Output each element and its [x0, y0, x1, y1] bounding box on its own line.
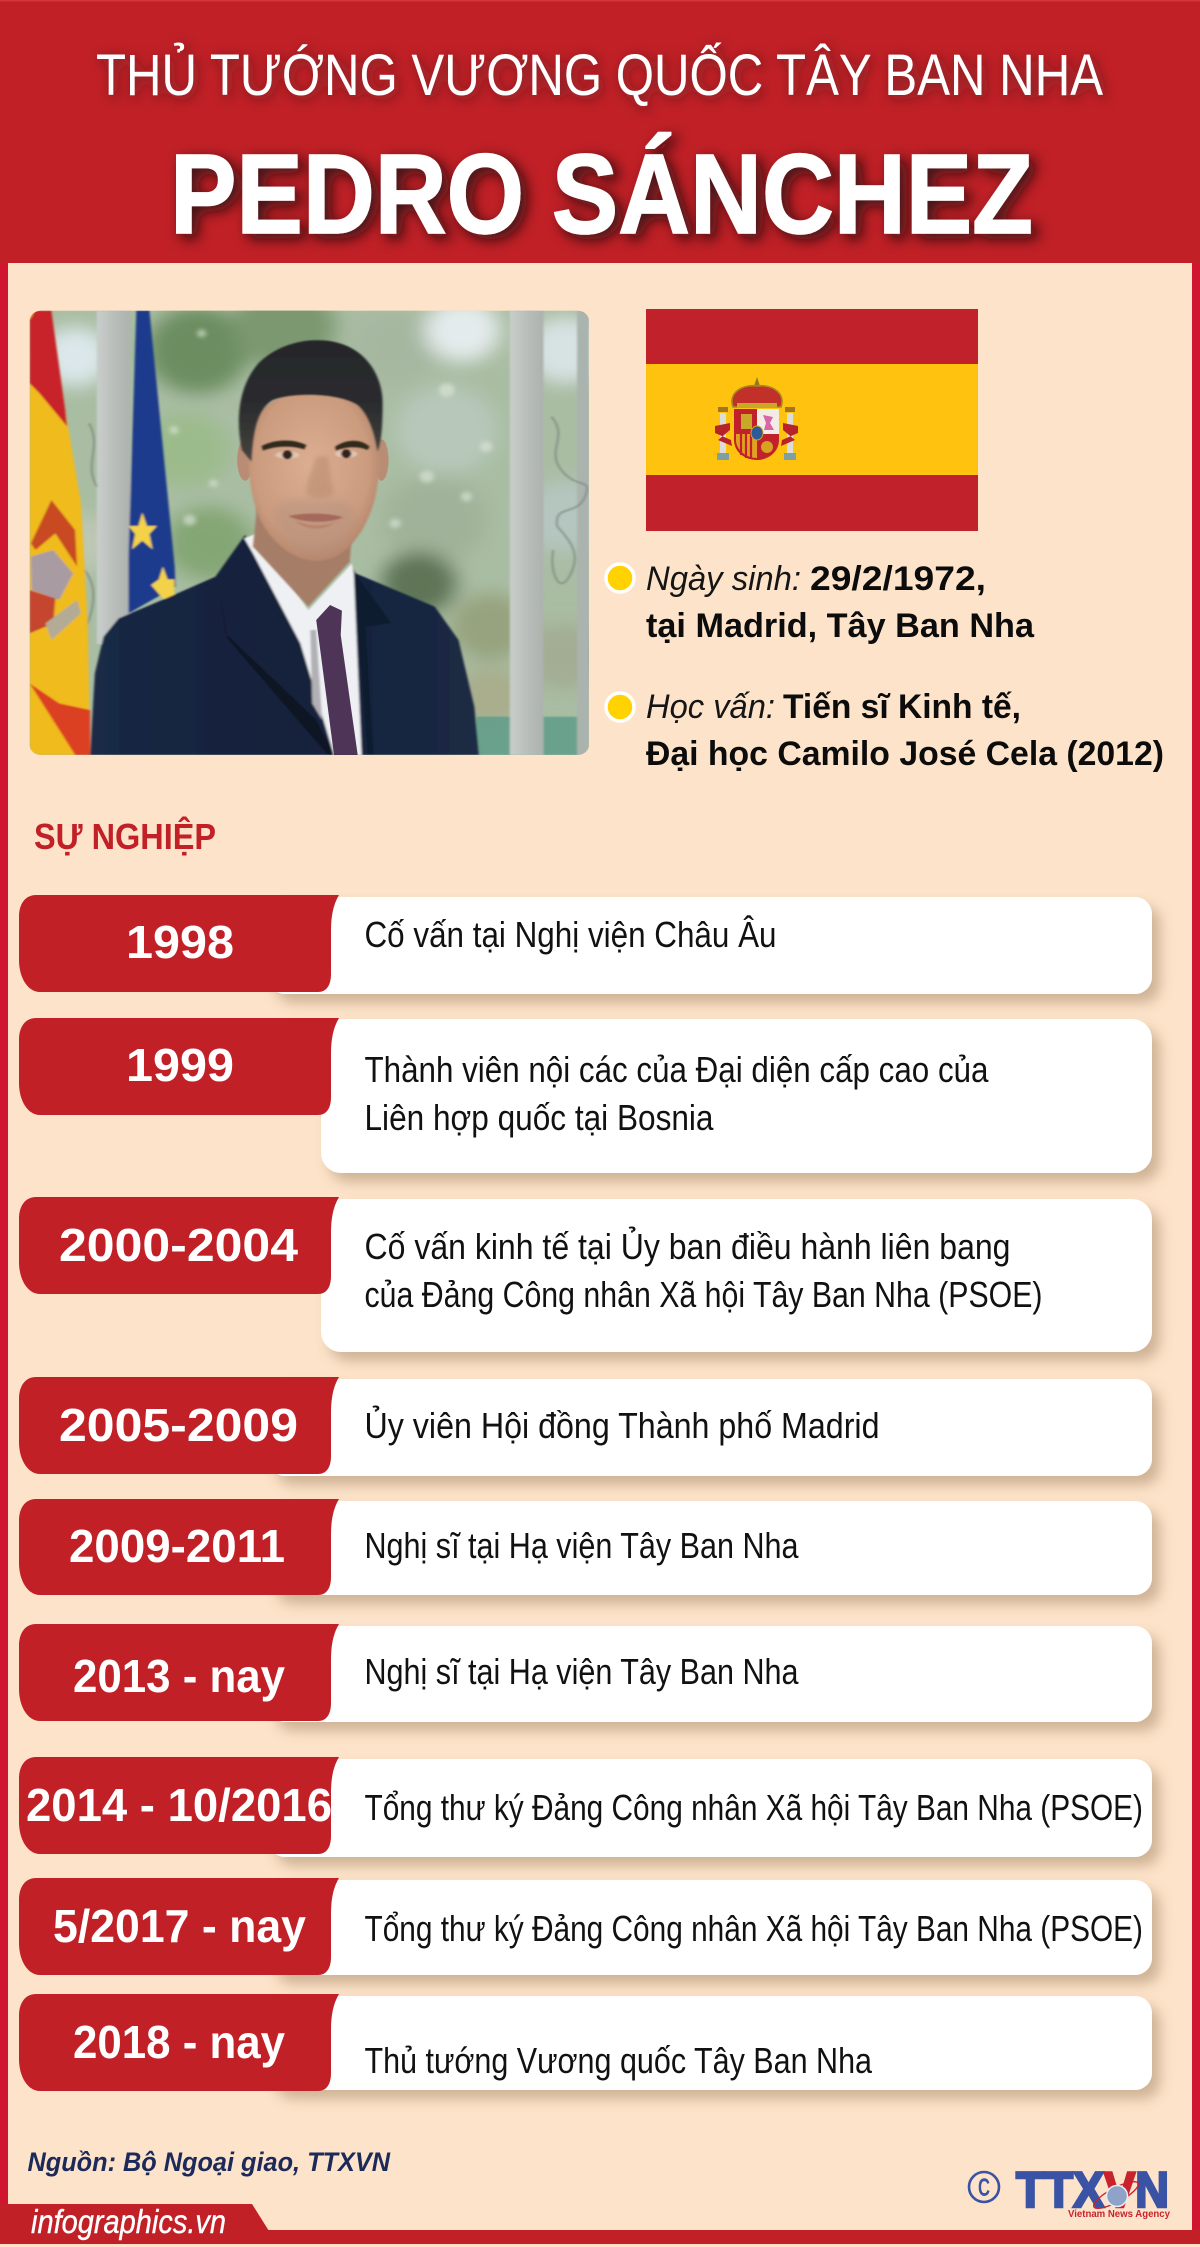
timeline row: 1998: 1998	[126, 916, 234, 968]
value: place: tại Madrid, Tây Ban Nha	[646, 607, 1035, 645]
EU flag	[128, 311, 175, 613]
timeline row: 2000-2004: của Đảng Công nhân Xã hội Tây Ban Nha (PSOE)	[364, 1274, 1042, 1315]
wrought iron window details	[81, 417, 587, 630]
suit	[90, 535, 479, 755]
timeline row: 1999: 1999	[126, 1039, 234, 1091]
timeline row: 2005-2009	[19, 1377, 1152, 1476]
timeline row: 2018 - nay: Thủ tướng Vương quốc Tây Ban Nha	[364, 2040, 873, 2081]
icon: copyright mark: C	[978, 2174, 990, 2202]
timeline row: 1998: Cố vấn tại Nghị viện Châu Âu	[364, 914, 776, 955]
timeline row: 1998	[19, 895, 1152, 994]
ears	[237, 442, 250, 481]
value: degree: Tiến sĩ Kinh tế,	[783, 688, 1021, 726]
bio: education	[606, 688, 1164, 773]
timeline row: 1999: Thành viên nội các của Đại diện cấp cao của	[364, 1049, 989, 1090]
portrait photo	[30, 283, 609, 755]
face	[248, 388, 380, 561]
timeline row: 2013 - nay	[19, 1624, 1152, 1722]
timeline row: 1999: Liên hợp quốc tại Bosnia	[364, 1097, 714, 1138]
timeline row: 2018 - nay: 2018 - nay	[73, 2016, 285, 2068]
icon: globe	[1091, 2177, 1141, 2213]
icon: yellow bullet	[606, 564, 634, 592]
timeline row: 2005-2009: Ủy viên Hội đồng Thành phố Madrid	[364, 1404, 880, 1446]
flag of Spain	[646, 309, 978, 531]
label: education: Học vấn:	[646, 688, 775, 726]
Spanish flag	[30, 311, 90, 755]
timeline row: 2013 - nay: Nghị sĩ tại Hạ viện Tây Ban Nha	[364, 1651, 799, 1692]
timeline row: 2014 - 10/2016	[19, 1757, 1152, 1857]
footer tag: infographics.vn: infographics.vn	[31, 2203, 226, 2240]
timeline row: 2018 - nay	[19, 1994, 1152, 2091]
bio: date of birth	[606, 560, 1035, 645]
value: date: 29/2/1972,	[810, 560, 986, 598]
timeline row: 2009-2011: Nghị sĩ tại Hạ viện Tây Ban Nha	[364, 1525, 799, 1566]
tie	[316, 605, 358, 755]
hair	[239, 340, 383, 462]
footer: bottom red strip	[0, 2230, 1200, 2244]
timeline row: 2009-2011: 2009-2011	[69, 1520, 285, 1572]
timeline row: 2005-2009: 2005-2009	[59, 1399, 298, 1451]
timeline row: 5/2017 - nay	[19, 1878, 1152, 1975]
nose shading	[306, 457, 334, 498]
tagline: Vietnam News Agency	[1068, 2208, 1170, 2220]
source note: Nguồn: Bộ Ngoại giao, TTXVN	[28, 2147, 390, 2177]
eyebrows, eyes, mouth	[262, 440, 370, 529]
panel: header band	[0, 0, 1200, 263]
icon: copyright mark	[969, 2172, 999, 2202]
label: date of birth: Ngày sinh:	[646, 560, 801, 598]
shirt	[244, 533, 362, 755]
timeline row: 2000-2004	[19, 1197, 1152, 1352]
timeline row: 2000-2004: 2000-2004	[59, 1219, 298, 1271]
title: name: PEDRO SÁNCHEZ	[170, 131, 1033, 257]
stubble shading	[277, 499, 353, 549]
timeline row: 2000-2004: Cố vấn kinh tế tại Ủy ban điều hành liên bang	[364, 1225, 1010, 1267]
timeline row: 1999	[19, 1018, 1152, 1173]
neck	[253, 507, 354, 607]
pillars	[97, 311, 130, 644]
railing	[476, 717, 510, 755]
timeline row: 2009-2011	[19, 1499, 1152, 1595]
wordmark: TTXVN	[1016, 2162, 1169, 2218]
heading: career: SỰ NGHIỆP	[34, 815, 216, 857]
value: university: Đại học Camilo José Cela (2012)	[646, 735, 1164, 773]
timeline row: 2014 - 10/2016: 2014 - 10/2016	[26, 1779, 332, 1831]
icon: yellow bullet	[606, 693, 634, 721]
logo: TTXVN	[969, 2162, 1170, 2220]
icon: coat of arms	[715, 377, 798, 460]
timeline row: 2013 - nay: 2013 - nay	[73, 1650, 285, 1702]
timeline row: 5/2017 - nay: 5/2017 - nay	[53, 1900, 306, 1952]
